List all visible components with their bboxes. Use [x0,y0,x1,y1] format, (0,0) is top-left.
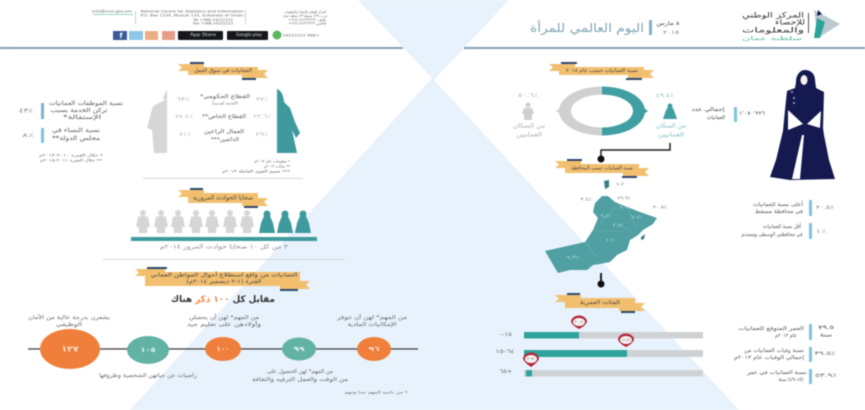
ribbon: share by governorate: نسبة العمانيات حسب المحافظة [571,166,633,172]
ribbon: road accident victims [178,188,268,208]
connector: donut to map ribbon [598,143,670,162]
age bar chart [495,332,703,376]
labour footnotes [222,158,290,174]
timeline node: 96: ٩٦ [368,345,380,353]
map of Oman: ٪١ [605,238,616,244]
footnote: survey: * من ناحية المهم جدا ومهم [344,390,408,394]
total of Omani women: إجمالي عدد [692,107,725,113]
map of Oman: ٪٧.٧ [632,216,643,220]
logo: والمعلومات [742,26,805,34]
stat: State Council [22,128,100,143]
stat: share of deaths [734,347,836,362]
social icons and app badges: App Store [190,32,216,38]
labour row: government sector: ٪٦٣ [176,97,190,103]
timeline node: 96 [357,337,391,361]
caption: job security: يشعرن بدرجة عالية من الأمان [28,313,111,321]
age bar chart: ١٥-٠ [498,332,512,338]
labour row: permanent employers: ٪٢٩ [256,132,269,138]
timeline node: 127: ١٢٧ [62,344,79,354]
stat: women of childbearing age: نسبة العمانيات في عمر [746,370,808,376]
stat: State Council: ٪٨ [22,133,34,139]
caption: personal satisfaction: راضيات عن حياتهن الشخصية وظروفها [99,373,197,379]
timeline node: 105 [127,336,169,364]
caption: education: وأولادهن على تعليم جيد [187,320,261,328]
stat: women of childbearing age: (١٥-٤٩) سنة [778,377,804,383]
ribbon: women in the labour market: العمانيات في سوق العمل [194,68,252,74]
contact block: فاكس ٢٤٢٢٢٢٢٣ ٩٦٨+ [288,22,326,26]
caption: education [187,313,261,328]
caption: job security: الوظيفي [56,322,83,328]
timeline node: 100: ١٠٠ [216,345,230,353]
timeline node: 99 [282,338,316,360]
stat: life expectancy: سنة [820,332,833,338]
header rule: right [464,47,865,49]
map of Oman: ٪١ [616,182,626,188]
stat: resignation: ٪٤٣ [19,108,33,114]
labour row: private sector: ٪٧٧.٤ [175,114,193,120]
total of Omani women: العمانيات [707,115,725,121]
logo [742,10,840,42]
social icons and app badges: +968 24222222 [282,32,320,38]
labour row: private sector: ٪٢٢.٦ [253,114,271,120]
ribbon: survey heading: الفترة (١-٢ ديسمبر ٢٠١٤م) [186,279,262,285]
ribbon: age groups: الفئات العمرية [580,300,621,306]
labour row: government sector: القطاع الحكومي* [200,93,251,100]
stat: lowest share: في محافظتي الوسطى ومسندم [742,232,803,238]
labour footnotes: ** بيانات ٢٠١٢م [264,164,290,168]
stat: lowest share [742,222,827,239]
heading: for every 100 males: مقابل كل ١٠٠ ذكر هناك [171,295,275,305]
contact block: هاتف ٢٤٢٢٢٢٢٢ ٩٦٨+ [288,18,326,22]
map of Oman: ٪٧.٨ [612,224,624,228]
caption: leisure: من الوقت والعمل الترفيه والثقافة [252,377,348,383]
woman illustration [770,70,835,180]
map pin: 65+: ٪٣.٩ [527,357,535,361]
stat: resignation: تركن الخدمة بسبب [50,107,108,114]
labour row: private sector: القطاع الخاص** [202,114,247,120]
caption: leisure: من المهم* لهن الحصول على [267,369,333,375]
stat: share of deaths: نسبة وفيات العمانيات من [744,348,805,354]
stat: State Council: مجلس الدولة** [52,136,100,142]
stat: resignation: نسبة الموظفات العمانيات [49,101,123,107]
ribbon: survey heading: العمانيات من واقع استطلاع أحوال المواطن العماني [150,270,298,278]
background: pale blue chevron band [130,0,739,410]
caption: leisure [252,369,348,383]
contact block: National Centre for Statistics and Information [140,10,244,14]
donut label: men: العمانيين [516,132,542,138]
contact block [92,10,328,26]
labour row: permanent employers: ٪٧١ [179,132,191,138]
stat: highest share: في محافظة مسقط [755,209,803,215]
map pin: 15-64 [618,334,634,347]
labour row: permanent employers [179,129,269,143]
donut label: women: من السكان [656,122,686,130]
labour row: government sector [176,93,268,106]
total of Omani women [692,107,765,122]
map pin: 0-15 [571,316,587,329]
left stats footnotes [39,152,103,162]
caption: financial means: من المهم* لهن أن تتوفر [336,313,407,321]
pictogram: road victims 3 of 10 [131,210,317,241]
donut label: women: العمانيين [658,132,684,138]
labour row: permanent employers: العمال الراعين [204,129,245,135]
contact block: Fax +968 24222223 [193,22,233,26]
labour figure: woman half [277,89,300,153]
stat: life expectancy: العمر المتوقع للعمانيات [738,326,804,332]
labour row: government sector: ٪٣٧ [256,97,268,103]
caption: job security [28,313,111,328]
logo: سلطنة عمان [742,36,802,42]
ribbon: survey heading [135,267,310,291]
map pin: 0-15: ٪٣٠.٦ [574,320,584,324]
map of Oman: ٪٢.٤ [580,198,592,202]
labour row: government sector: (الخدمة المدنية) [212,100,238,106]
labour footnotes: *** مسح القوى العاملة ٢٠١٣م [222,168,290,174]
map of Oman [545,180,668,273]
connector: map to age ribbon [598,273,604,288]
social icons and app badges: Google play [236,32,262,38]
donut label: men: ٪٥٠.٦ [518,93,538,99]
stat: resignation: الإستقالة* [63,115,102,121]
stat: State Council: نسبة النساء في [52,128,100,134]
contact block: P.O. Box 1234, Muscat 133, Sultanate of Oman [140,14,244,18]
left stats footnotes: ** خلال الفترة ٢٠١١-٢٠١٥م [40,158,102,162]
timeline node: 100 [205,337,241,361]
stat: share of deaths: ٪٣٩.٥ [814,351,836,357]
map of Oman: ٪٢٩.٩ [618,196,631,202]
map of Oman: ٪٢٠.٥ [653,206,668,210]
ribbon: age groups [555,293,645,313]
stat: highest share [753,200,834,216]
timeline node: 105: ١٠٥ [140,346,156,354]
map pin: 65+ [523,352,539,367]
contact block: info@ncsi.gov.om [92,10,133,14]
age bar chart: ٦٤-١٥ [495,349,515,355]
timeline node: 127 [40,329,100,369]
stat: highest share: ٪٢٠.٥ [816,205,834,211]
logo: المركز الوطني [742,10,804,20]
social icons and app badges: f [119,32,123,40]
donut label: women [656,93,686,138]
stat: share of deaths: إجمالي الوفيات عام ٢٠١٣م [734,355,805,361]
timeline node: 99: ٩٩ [294,345,305,353]
title: اليوم العالمي للمرأة [530,20,644,36]
labour row: permanent employers: الدائمين*** [211,137,239,143]
total of Omani women: ١٬٠٧٠٬٢٢٦ [739,110,765,117]
date: ٢٠١٥ [663,30,679,36]
ribbon: women in the labour market [178,62,268,80]
pictogram caption: ٣ من كل ١٠ ضحايا حوادث المرور ٢٠١٤م [160,244,289,250]
map of Oman: ٪٩.٥ [600,214,612,220]
contact block: ص.ب ١٢٣٤ مسقط ١٣٣ سلطنة عمان [283,14,328,18]
donut label: men: من السكان [513,122,545,130]
age bar chart: +٦٥ [500,369,513,375]
stat: lowest share: ٪١ [816,229,827,235]
timeline axis [28,348,418,350]
caption: financial means: الإمكانيات المادية [348,321,397,328]
stat: highest share: أعلى نسبة للعمانيات [753,200,803,208]
logo: للإحصاء [775,18,805,26]
date [656,21,680,36]
date: ٨ مارس [656,21,680,27]
stat: women of childbearing age: ٪٥٣.٩ [815,373,837,379]
social icons and app badges [113,30,320,40]
map of Oman: ٪٧.١ [620,206,631,210]
ribbon: share of Omani women by gender [549,62,654,80]
labour row: private sector [175,114,271,120]
contact block: المركز الوطني للإحصاء والمعلومات [284,10,326,15]
left stats footnotes: * خلال الفترة ٢٠١٠-٢٠١٣م [39,152,103,158]
labour footnotes: * معلومات عام ٢٠١٣م [254,158,290,164]
donut label: women: ٪٤٩.٤ [656,93,674,99]
map pin: 15-64: ٪٦٦.٥ [622,338,631,342]
stat: women of childbearing age [746,369,837,384]
stat: resignation [19,101,123,121]
labour figure: man half [147,89,167,153]
ribbon: share of Omani women by gender: نسبة العمانيات حسب عام ٢٠١٨ [566,68,638,74]
stat: life expectancy [738,324,834,340]
stat: life expectancy: عام ٢٠١٣م [775,333,797,339]
title bar [649,20,652,35]
caption: financial means [336,313,407,328]
contact block: Tel +968 24222222 [192,18,233,22]
header rule: left [0,47,403,49]
ribbon: road accident victims: ضحايا الحوادث المرورية [193,194,253,202]
caption: education: من المهم* لهن أن يحصلن [189,313,259,321]
map of Oman: ٪٩.٣ [566,255,580,261]
donut label: men [513,93,545,138]
ribbon: share by governorate [555,159,649,178]
stat: life expectancy: ٧٩.٥ [818,325,834,331]
stat: lowest share: أقل نسبة للعمانيات [763,222,801,230]
donut chart [556,86,648,136]
